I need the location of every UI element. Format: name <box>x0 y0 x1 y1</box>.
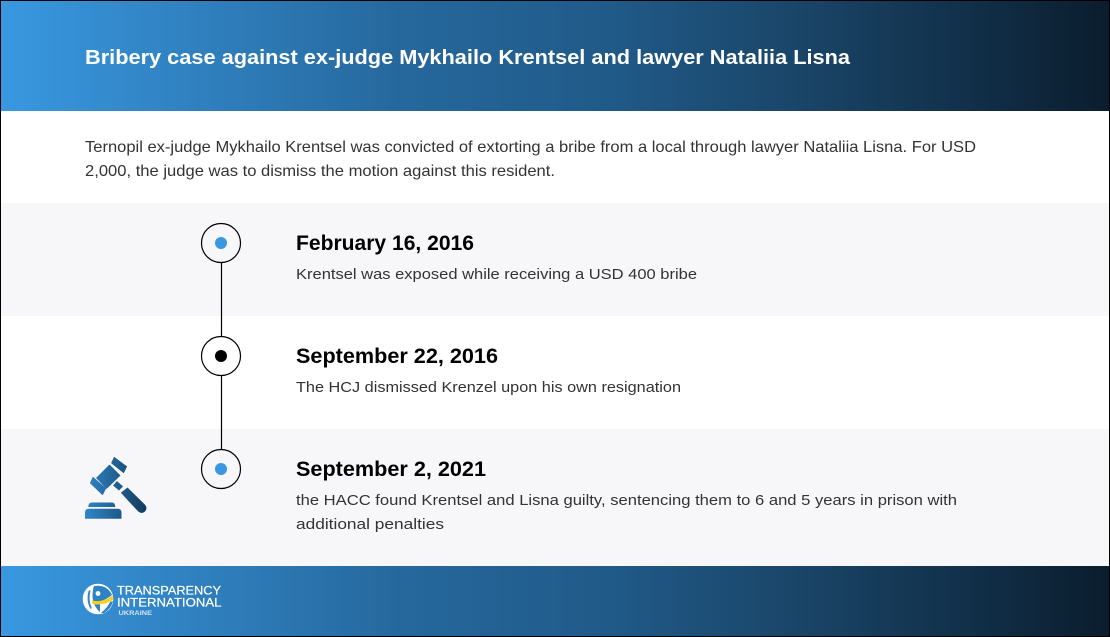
row background: February 16, 2016 <box>1 203 1109 316</box>
logo wordmark: UKRAINE <box>118 610 153 617</box>
event: February 16, 2016 <box>296 232 697 283</box>
timeline marker: September 2, 2021 <box>202 450 240 488</box>
event: February 16, 2016: Krentsel was exposed while receiving a USD 400 bribe <box>296 266 697 283</box>
title: Bribery case against ex-judge Mykhailo Krentsel and lawyer Nataliia Lisna <box>85 47 851 69</box>
logo wordmark: TRANSPARENCY <box>117 586 221 598</box>
event: September 2, 2021 <box>296 458 957 533</box>
logo wordmark: INTERNATIONAL <box>117 598 222 610</box>
event: September 2, 2021: the HACC found Krentsel and Lisna guilty, sentencing them to 6 and 5 years in prison with <box>296 492 957 509</box>
timeline connector <box>220 262 222 450</box>
logo globe <box>83 584 114 614</box>
timeline marker: February 16, 2016 <box>202 224 240 262</box>
icon: gavel <box>85 458 146 519</box>
event: September 22, 2016: The HCJ dismissed Krenzel upon his own resignation <box>296 379 681 396</box>
intro text: Ternopil ex-judge Mykhailo Krentsel was convicted of extorting a bribe from a local through lawyer Nataliia Lisna. For USD <box>85 139 976 156</box>
logo: Transparency International Ukraine <box>83 584 222 617</box>
event: September 2, 2021: September 2, 2021 <box>296 458 486 481</box>
event: February 16, 2016: February 16, 2016 <box>296 232 474 255</box>
event: September 22, 2016: September 22, 2016 <box>296 345 498 368</box>
logo wordmark <box>117 586 222 617</box>
timeline marker: September 22, 2016 <box>202 336 240 376</box>
event: September 22, 2016 <box>296 345 681 396</box>
header band <box>1 1 1109 111</box>
intro text <box>85 139 976 180</box>
footer band <box>1 566 1109 636</box>
intro text: 2,000, the judge was to dismiss the motion against this resident. <box>85 163 555 180</box>
event: September 2, 2021: additional penalties <box>296 516 444 533</box>
row background: September 2, 2021 <box>1 429 1109 566</box>
